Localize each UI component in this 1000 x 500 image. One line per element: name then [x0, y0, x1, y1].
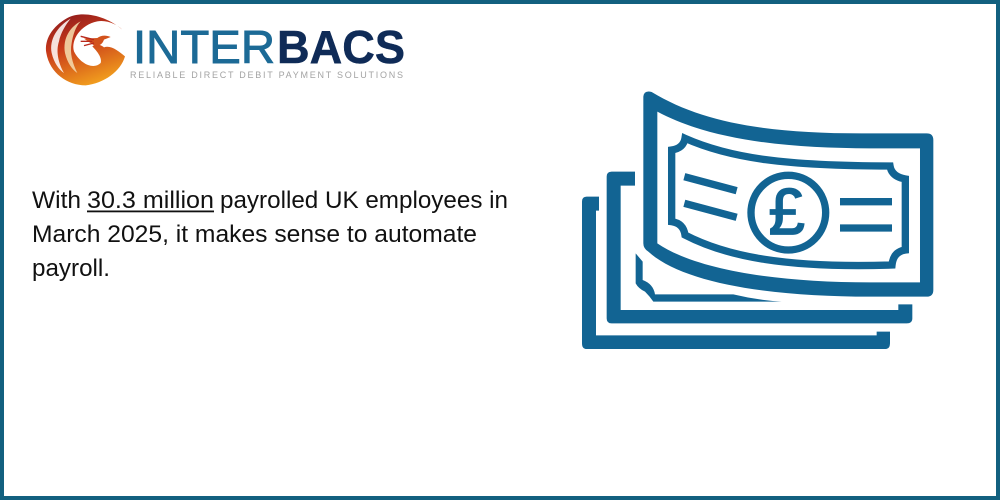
middle note inner border — [636, 253, 782, 302]
icon: stack of pound banknotes — [582, 92, 933, 349]
middle note — [607, 172, 912, 323]
icon: phoenix swirl — [46, 14, 125, 85]
right text lines — [840, 202, 892, 228]
logo: Interbacs — [46, 14, 405, 85]
body text: March 2025, it makes sense to automate — [32, 221, 477, 248]
back note — [582, 197, 890, 349]
front note inner border — [672, 138, 905, 266]
wordmark: INTER: INTER — [133, 21, 275, 73]
body text: 30.3 million — [87, 187, 214, 214]
underline: 30.3 million — [87, 210, 214, 212]
left text lines — [684, 177, 737, 217]
front note frame — [643, 92, 933, 297]
pound coin: £ — [769, 175, 805, 248]
body text — [32, 187, 508, 282]
wordmark: BACS: BACS — [277, 21, 405, 73]
body text: payroll. — [32, 255, 110, 282]
pound coin — [751, 175, 826, 250]
body text: payrolled UK employees in — [220, 187, 508, 214]
tagline: RELIABLE DIRECT DEBIT PAYMENT SOLUTIONS — [130, 70, 403, 80]
body text: With — [32, 187, 81, 214]
